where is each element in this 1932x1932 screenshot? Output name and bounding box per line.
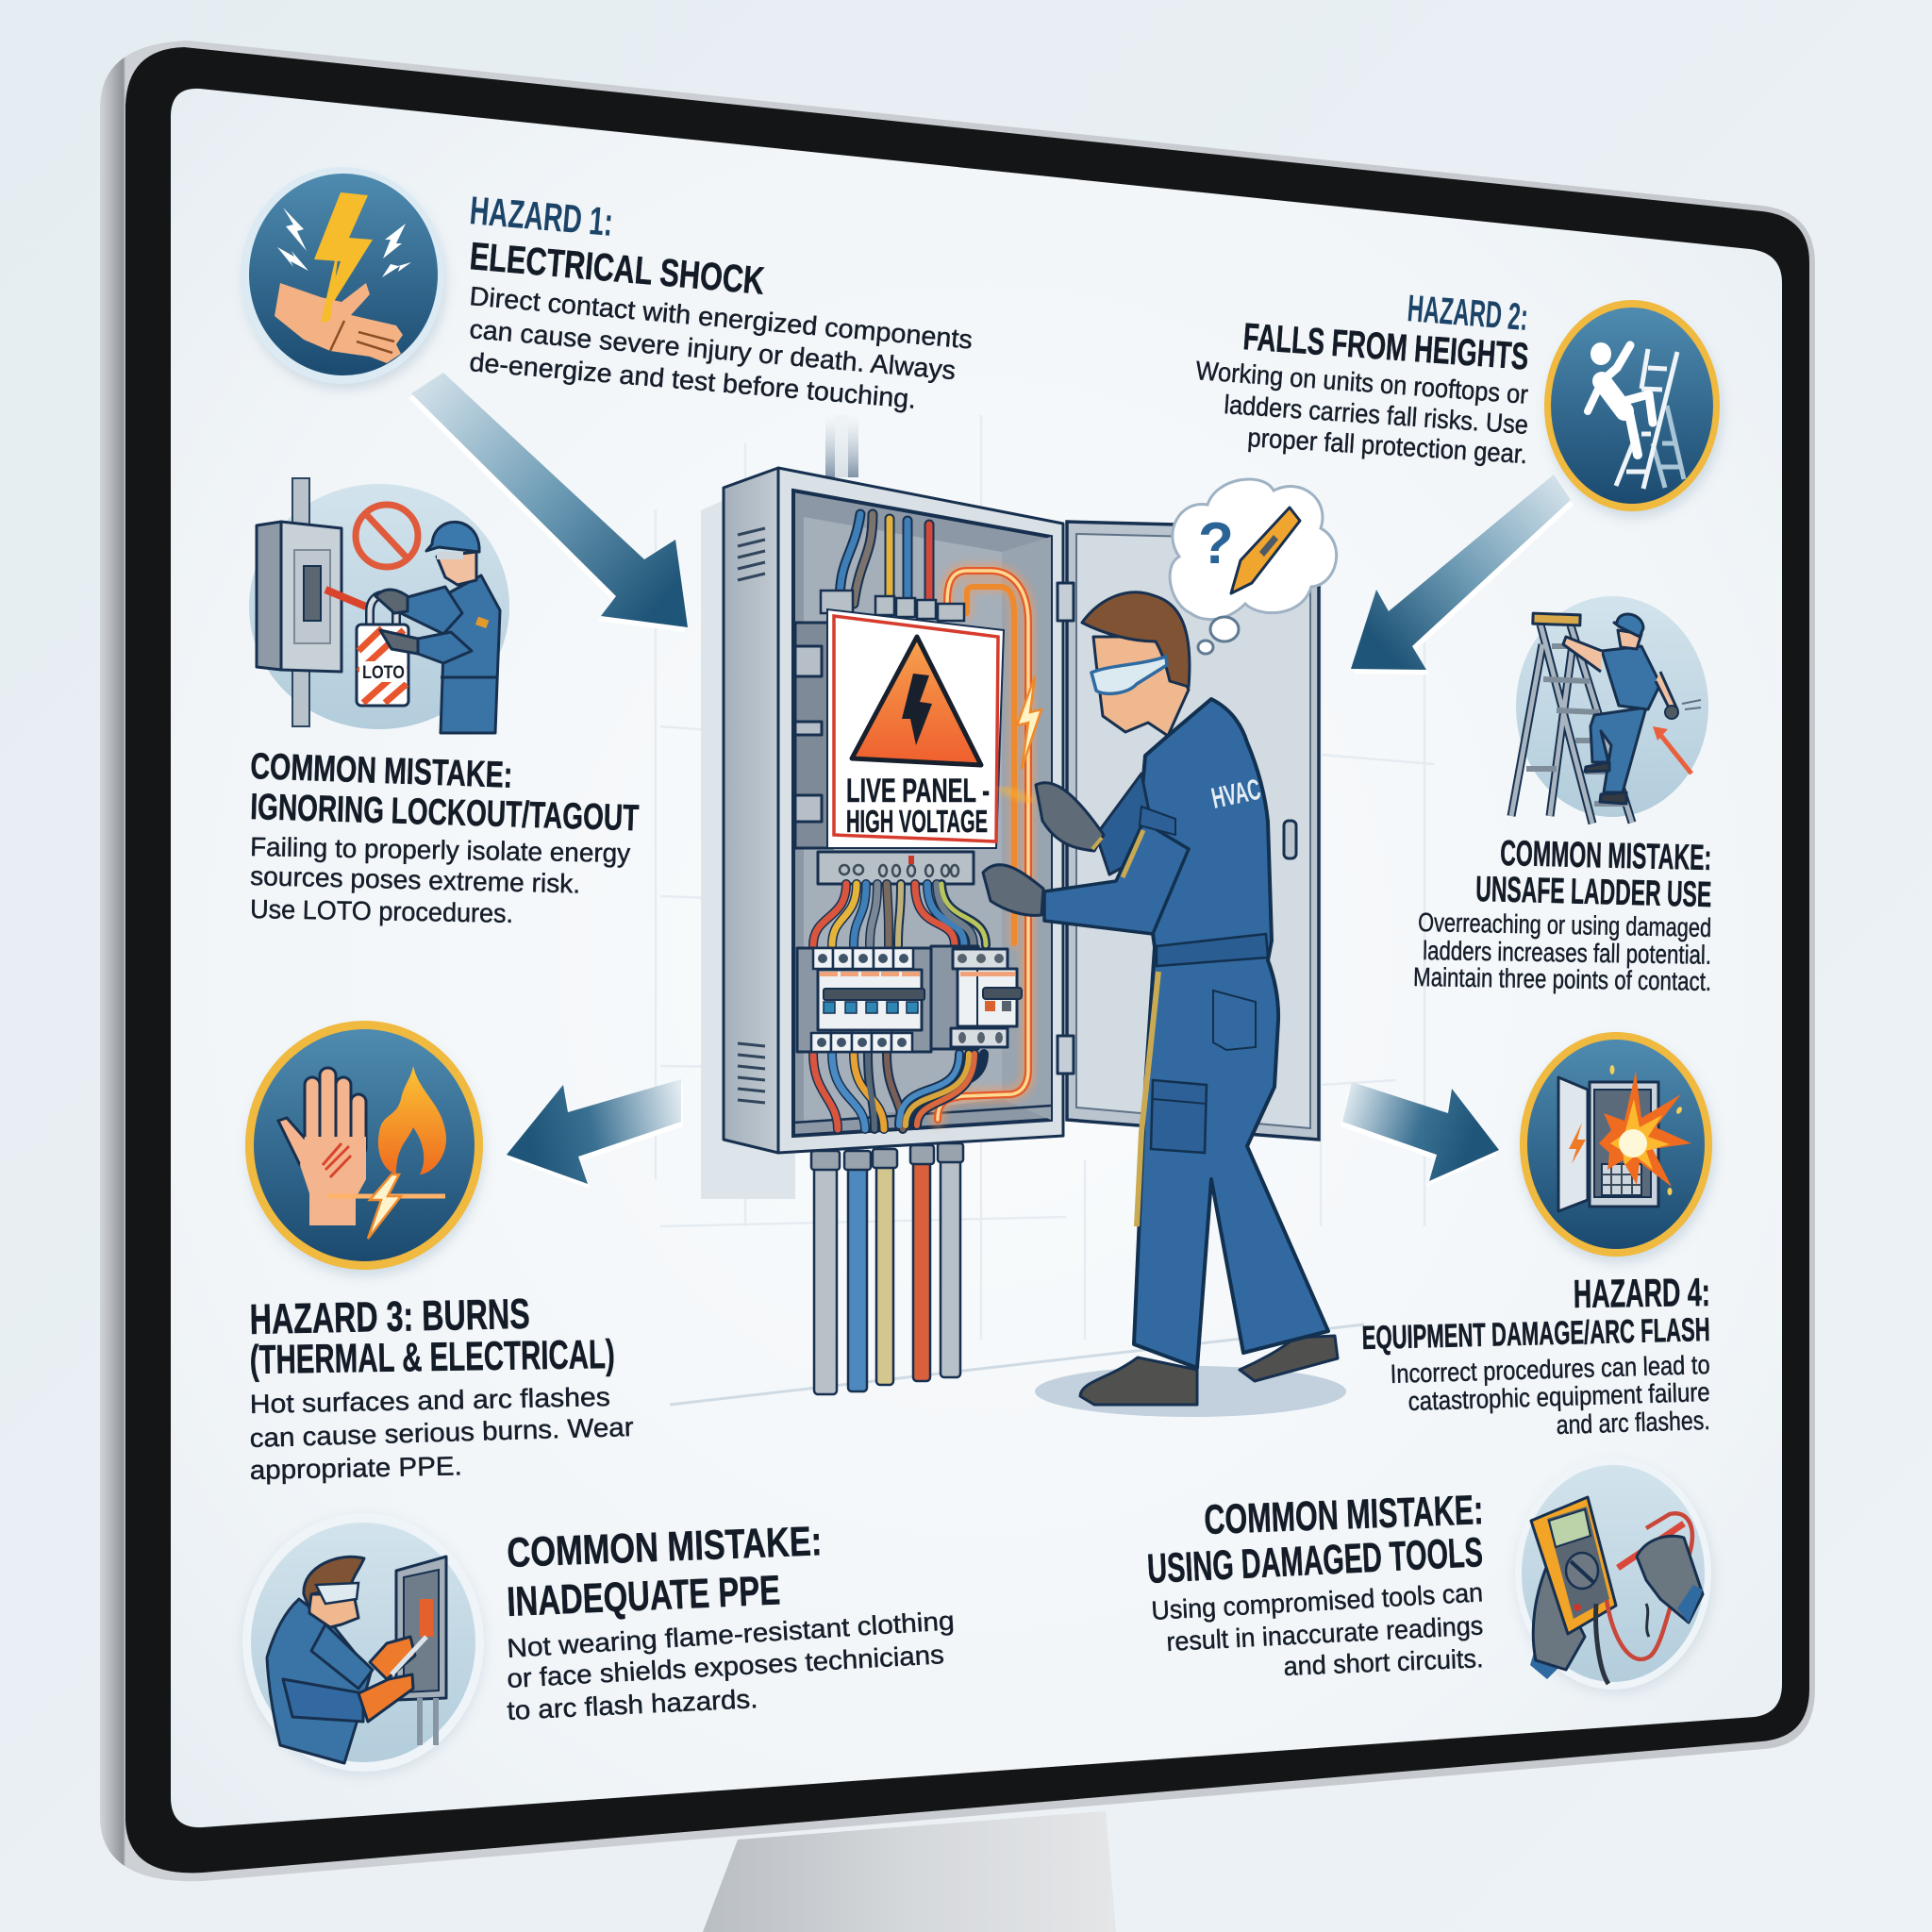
far arm	[1036, 774, 1157, 874]
screen	[171, 89, 1782, 1827]
near arm	[983, 807, 1189, 934]
glowing live wire	[938, 571, 1028, 1120]
text: common mistake ladder: ladders increases fall potential.	[1423, 936, 1711, 970]
text: hazard 2	[1195, 288, 1530, 469]
monitor stand	[703, 1811, 1116, 1932]
icon: hazard 1 electric shock	[241, 167, 445, 389]
floor line	[670, 1324, 1364, 1405]
text: common mistake PPE	[506, 1518, 955, 1725]
text: common mistake lockout: IGNORING LOCKOUT/TAGOUT	[250, 787, 640, 839]
belt and stripes	[1113, 802, 1268, 1226]
text: common mistake lockout: Failing to properly isolate energy	[250, 832, 630, 868]
text: common mistake lockout: Use LOTO procedures.	[250, 894, 513, 928]
text: hazard 4: Incorrect procedures can lead to	[1390, 1350, 1710, 1389]
text: hazard 4: and arc flashes.	[1556, 1406, 1710, 1440]
text: common mistake PPE: COMMON MISTAKE:	[507, 1518, 823, 1576]
icon: inadequate PPE scene	[242, 1513, 484, 1775]
icon: lockout tagout scene: LOTO	[362, 663, 405, 683]
lower wires	[813, 1054, 984, 1129]
text: common mistake ladder: COMMON MISTAKE:	[1500, 834, 1712, 878]
text: hazard 3: HAZARD 3: BURNS	[249, 1290, 530, 1343]
thought bubble: ?	[1198, 511, 1234, 576]
warning sign	[827, 609, 1004, 848]
text: hazard 1: ELECTRICAL SHOCK	[468, 234, 766, 303]
text: hazard 2: ladders carries fall risks. Use	[1224, 390, 1529, 440]
text: hazard 2: FALLS FROM HEIGHTS	[1241, 316, 1530, 378]
panel shadow	[701, 491, 795, 1199]
text: common mistake PPE: INADEQUATE PPE	[506, 1567, 781, 1625]
text: hazard 4: HAZARD 4:	[1573, 1270, 1710, 1316]
text: hazard 1: can cause severe injury or death. Always	[468, 314, 957, 385]
terminal strip	[818, 852, 974, 884]
text: common mistake tools: result in inaccurate readings	[1166, 1610, 1484, 1657]
cabinet door	[1058, 522, 1319, 1140]
icon: hazard 4 arc flash	[1520, 1032, 1714, 1262]
hvac back label: HVAC	[1208, 773, 1263, 815]
technician head	[1082, 592, 1190, 736]
warning sign: LIVE PANEL -	[846, 773, 990, 809]
arrow: panel to hazard 4	[1341, 1082, 1499, 1186]
text: common mistake tools: USING DAMAGED TOOLS	[1146, 1529, 1484, 1592]
text: hazard 3: can cause serious burns. Wear	[249, 1412, 634, 1453]
sign mounting block	[795, 591, 964, 848]
floor shadow	[1035, 1366, 1346, 1417]
pipe above panel	[825, 415, 858, 477]
text: hazard 3	[249, 1290, 634, 1485]
text: common mistake lockout: sources poses extreme risk.	[250, 861, 581, 899]
text: hazard 2: HAZARD 2:	[1406, 288, 1529, 339]
electrical panel	[724, 468, 1063, 1153]
conduits below panel	[811, 1143, 963, 1394]
text: common mistake PPE: to arc flash hazards.	[507, 1684, 758, 1725]
icon: hazard 2 fall from ladder	[1544, 300, 1722, 517]
text: common mistake PPE: or face shields exposes technicians	[507, 1640, 945, 1693]
text: common mistake tools	[1146, 1487, 1484, 1681]
arrow: hazard 1 to panel	[408, 373, 688, 632]
text: hazard 3: appropriate PPE.	[249, 1451, 462, 1485]
text: hazard 3: Hot surfaces and arc flashes	[249, 1382, 610, 1419]
text: hazard 3: (THERMAL & ELECTRICAL)	[249, 1332, 615, 1383]
technician	[983, 592, 1338, 1405]
icon: lockout tagout scene	[249, 478, 509, 733]
text: common mistake ladder: Maintain three points of contact.	[1413, 962, 1711, 996]
warning sign: HIGH VOLTAGE	[846, 804, 988, 839]
icon: damaged tools scene	[1515, 1457, 1713, 1693]
text: common mistake PPE: Not wearing flame-resistant clothing	[506, 1606, 955, 1663]
text: hazard 4: EQUIPMENT DAMAGE/ARC FLASH	[1361, 1311, 1710, 1357]
text: common mistake lockout: COMMON MISTAKE:	[250, 746, 513, 796]
background grid	[656, 415, 1434, 1340]
sparks at fingertip	[1000, 788, 1033, 802]
icon: hazard 3 burns	[245, 1021, 483, 1275]
text: hazard 2: proper fall protection gear.	[1247, 423, 1528, 469]
text: common mistake tools: Using compromised tools can	[1151, 1577, 1484, 1625]
breaker bank left	[797, 948, 931, 1052]
icon: lightning spark	[1017, 676, 1041, 769]
text: hazard 1	[468, 188, 974, 414]
text: hazard 1: Direct contact with energized components	[468, 281, 974, 355]
text: common mistake ladder	[1413, 834, 1712, 996]
text: common mistake lockout	[250, 746, 640, 928]
breaker bank right	[931, 946, 1022, 1049]
text: common mistake tools: COMMON MISTAKE:	[1204, 1487, 1484, 1543]
text: hazard 4	[1361, 1270, 1710, 1440]
technician coverall	[1134, 699, 1328, 1368]
text: hazard 1: HAZARD 1:	[468, 188, 615, 244]
arrow: hazard 2 to panel	[1351, 475, 1574, 675]
text: hazard 1: de-energize and test before touching.	[468, 347, 917, 414]
text: common mistake ladder: Overreaching or using damaged	[1418, 908, 1711, 942]
text: hazard 4: catastrophic equipment failure	[1407, 1377, 1710, 1416]
thought bubble	[1170, 479, 1337, 654]
middle wires	[813, 884, 986, 945]
top wires	[840, 514, 929, 613]
text: common mistake tools: and short circuits.	[1283, 1643, 1484, 1681]
text: common mistake ladder: UNSAFE LADDER USE	[1475, 870, 1712, 915]
arrow: panel to hazard 3	[507, 1079, 683, 1189]
icon: unsafe ladder scene	[1511, 596, 1708, 824]
technician boots	[1080, 1336, 1338, 1405]
text: hazard 2: Working on units on rooftops or	[1195, 356, 1529, 409]
